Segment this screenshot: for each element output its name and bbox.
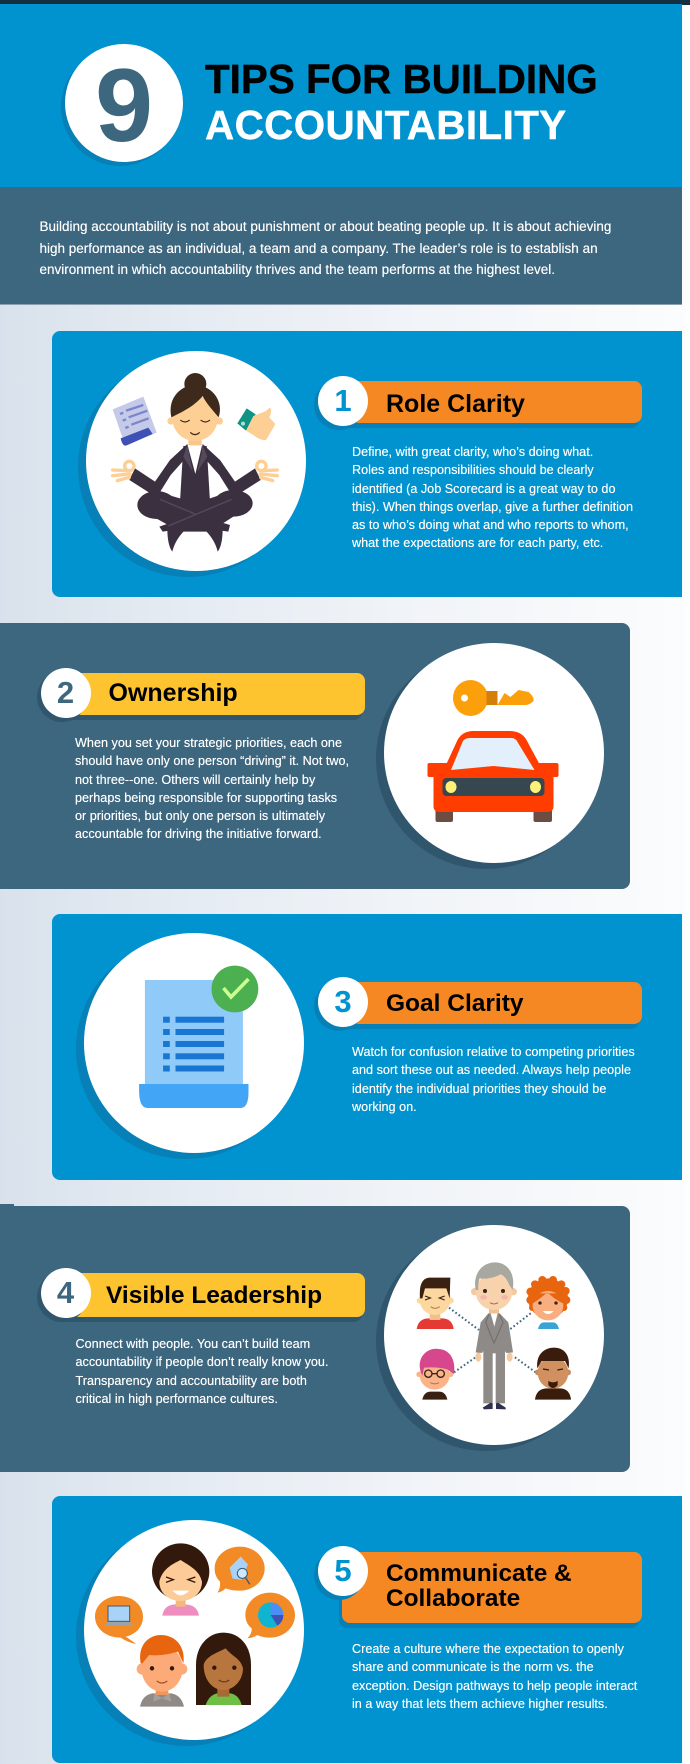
body text — [76, 1337, 328, 1406]
intro text — [40, 219, 611, 278]
body text — [352, 445, 633, 550]
body text: perhaps being responsible for supporting tasks — [75, 791, 337, 805]
panel: tip 2 ownership — [0, 623, 630, 889]
heading text: Communicate & — [386, 1560, 572, 1587]
heading badge 1 — [314, 376, 642, 430]
body text: identify the individual priorities they should be — [352, 1082, 606, 1096]
icon: big number 9 circle: 9 — [95, 48, 153, 164]
icon: big number 9 circle — [65, 44, 183, 162]
number 2: 2 — [57, 675, 74, 710]
illustration: key and car — [384, 643, 604, 863]
intro text: Building accountability is not about punishment or about beating people up. It is about achieving — [40, 219, 611, 234]
illustration: leader connected to team — [384, 1225, 604, 1445]
body text: Watch for confusion relative to competing priorities — [352, 1045, 635, 1059]
body text: should have only one person “driving” it. Not two, — [75, 754, 349, 768]
heading text: Ownership — [108, 679, 238, 707]
body text: accountable for driving the initiative forward. — [75, 827, 322, 841]
body text: what the expectations are for each party, etc. — [352, 536, 603, 550]
top dark strip — [0, 0, 690, 5]
panel: introduction — [0, 187, 682, 305]
number 3: 3 — [334, 984, 352, 1019]
bar — [62, 673, 364, 715]
number 1: 1 — [334, 383, 352, 418]
body text: this). When things overlap, give a further definition — [352, 500, 633, 514]
number 3 — [318, 977, 368, 1027]
heading text: Visible Leadership — [106, 1282, 322, 1309]
illustration: checked document — [84, 933, 304, 1153]
title — [205, 56, 598, 148]
body text: working on. — [352, 1100, 417, 1114]
tab notch above tip 4 — [0, 1204, 14, 1207]
body text: identified (a Job Scorecard is a great way to do — [352, 482, 616, 496]
heading badge 4 — [37, 1268, 365, 1322]
number 5: 5 — [334, 1553, 352, 1588]
body text: Connect with people. You can’t build team — [76, 1337, 310, 1351]
body text — [352, 1045, 635, 1114]
heading badge 5 — [314, 1546, 642, 1628]
heading badge 3 — [314, 977, 642, 1031]
heading text: Goal Clarity — [386, 990, 524, 1017]
body text: and sort these out as needed. Always help people — [352, 1063, 631, 1077]
body text: Define, with great clarity, who’s doing what. — [352, 445, 593, 459]
heading text: Collaborate — [386, 1585, 520, 1612]
body text — [352, 1642, 638, 1711]
body text: When you set your strategic priorities, each one — [75, 736, 342, 750]
number 4 — [40, 1268, 90, 1318]
title: TIPS FOR BUILDING — [205, 56, 598, 102]
body text: Transparency and accountability are both — [76, 1374, 307, 1388]
panel: tip 4 visible leadership — [0, 1206, 630, 1472]
intro text: high performance as an individual, a team and a company. The leader’s role is to establish an — [40, 241, 598, 256]
body text: exception. Design pathways to help people interact — [352, 1679, 637, 1693]
body text: critical in high performance cultures. — [76, 1392, 278, 1406]
heading text — [386, 1560, 572, 1612]
number 2 — [40, 668, 90, 718]
body text: in a way that lets them achieve higher results. — [352, 1697, 608, 1711]
illustration: three people with speech bubbles — [84, 1520, 304, 1740]
body text: not three--one. Others will certainly help by — [75, 773, 315, 787]
panel: tip 1 role clarity — [52, 331, 682, 597]
number 5 — [318, 1546, 368, 1596]
panel: tip 3 goal clarity — [52, 914, 682, 1180]
body text: share and communicate is the norm vs. the — [352, 1660, 594, 1674]
body text: accountability if people don’t really know you. — [76, 1355, 328, 1369]
body text: or priorities, but only one person is ultimately — [75, 809, 325, 823]
heading text: Role Clarity — [386, 390, 525, 418]
heading badge 2 — [37, 668, 365, 722]
bar — [340, 381, 642, 423]
panel: tip 5 communicate and collaborate — [52, 1496, 682, 1763]
body text: Roles and responsibilities should be clearly — [352, 463, 594, 477]
body text: Create a culture where the expectation to openly — [352, 1642, 624, 1656]
bar — [342, 1552, 642, 1623]
intro text: environment in which accountability thrives and the team performs at the highest level. — [40, 262, 555, 277]
number 1 — [318, 376, 368, 426]
bar — [62, 1273, 364, 1317]
bar — [340, 982, 642, 1024]
number 4: 4 — [57, 1275, 74, 1310]
body text — [74, 736, 349, 841]
title: ACCOUNTABILITY — [205, 102, 567, 148]
body text: as to who’s doing what and who reports to whom, — [352, 518, 629, 532]
illustration: meditating businesswoman — [86, 351, 306, 571]
panel: header banner — [0, 4, 682, 187]
